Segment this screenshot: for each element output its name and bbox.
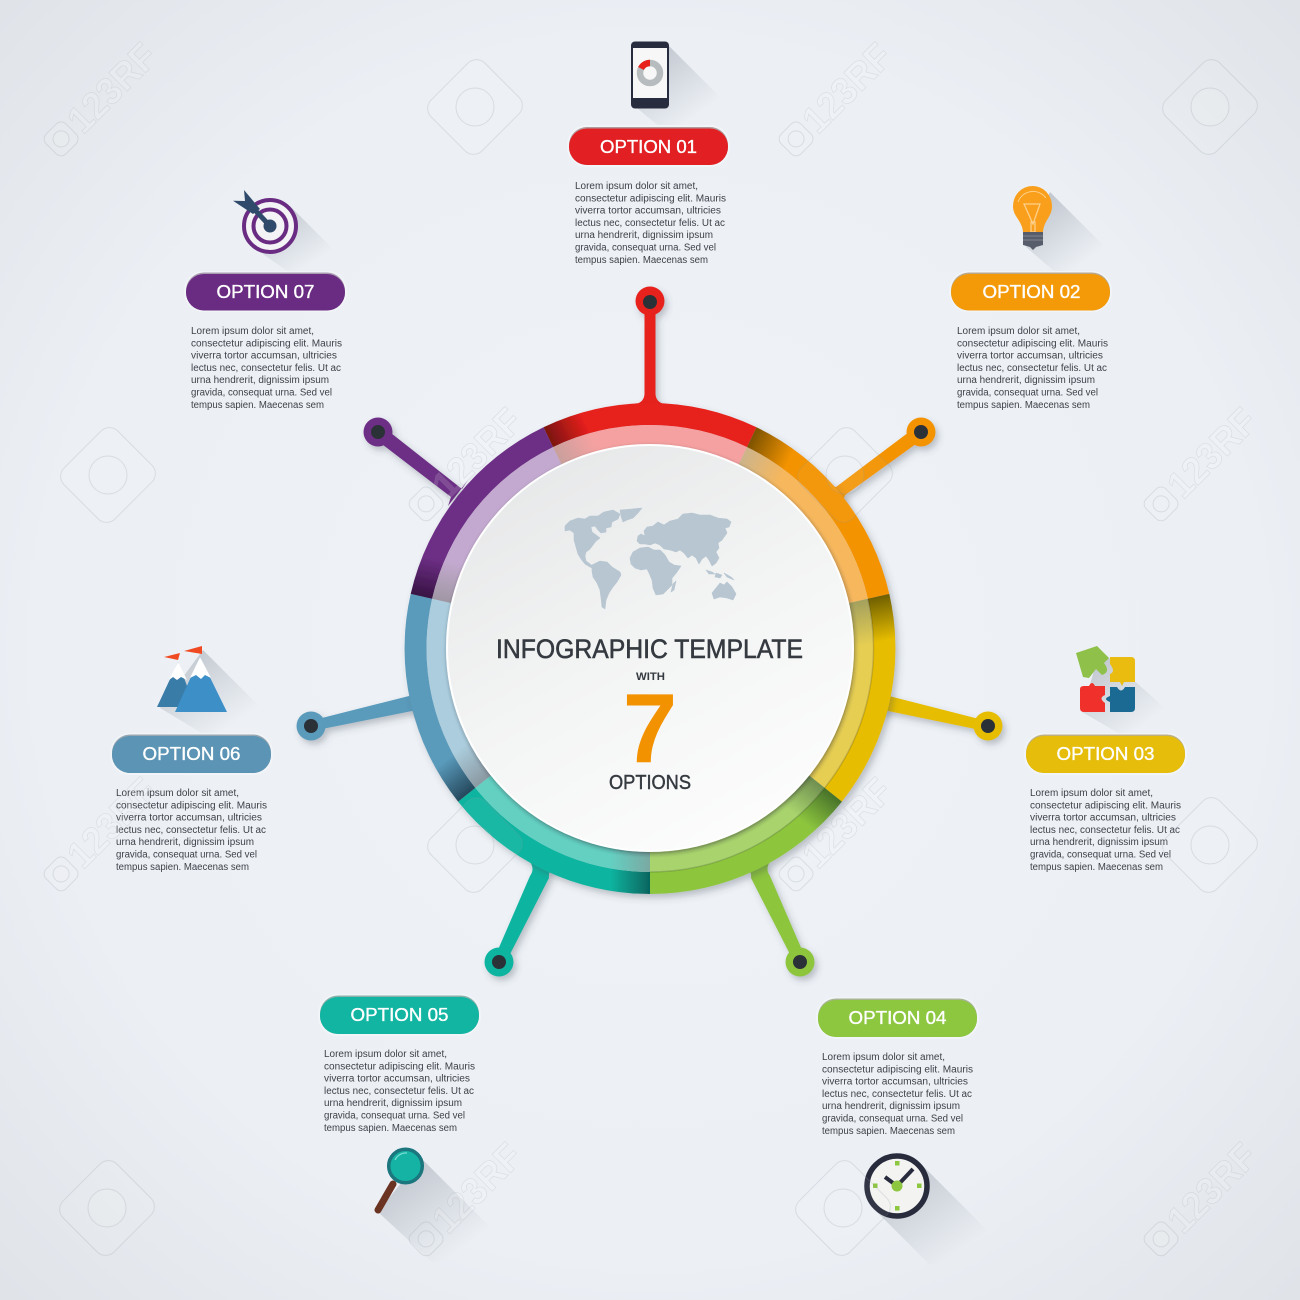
big number 7: 7 bbox=[623, 673, 677, 783]
icon: clock bbox=[867, 1156, 1022, 1265]
watermarks: 123RF bbox=[425, 401, 531, 507]
connector: option 05 bbox=[484, 862, 555, 976]
text: option 05: gravida, consequat urna. Sed vel bbox=[324, 1110, 465, 1122]
text: option 07: gravida, consequat urna. Sed vel bbox=[191, 388, 332, 398]
pill: option 04 bbox=[816, 997, 979, 1039]
text: option 01: consectetur adipiscing elit. Mauris bbox=[575, 193, 726, 204]
text: option 02: tempus sapien. Maecenas sem bbox=[957, 400, 1090, 411]
pill: option 06: OPTION 06 bbox=[142, 744, 240, 764]
text: option 04: urna hendrerit, dignissim ipsum bbox=[822, 1101, 960, 1112]
text: option 06: Lorem ipsum dolor sit amet, bbox=[116, 788, 239, 799]
text: option 01 bbox=[575, 181, 726, 266]
text: option 01: tempus sapien. Maecenas sem bbox=[575, 255, 708, 266]
text: option 03: viverra tortor accumsan, ultricies bbox=[1030, 813, 1176, 824]
pill: option 04: OPTION 04 bbox=[848, 1008, 946, 1028]
text: option 05: tempus sapien. Maecenas sem bbox=[324, 1123, 457, 1134]
connector: option 07 bbox=[364, 418, 468, 506]
icon: mountains bbox=[157, 646, 288, 735]
pill: option 07: OPTION 07 bbox=[216, 282, 314, 302]
text: option 07: lectus nec, consectetur felis. Ut ac bbox=[191, 363, 341, 374]
icon: light bulb bbox=[1013, 186, 1130, 272]
text: option 04 bbox=[822, 1052, 973, 1137]
watermarks: 123RF bbox=[1160, 1136, 1266, 1242]
text: option 01: urna hendrerit, dignissim ipsum bbox=[575, 230, 713, 241]
options label: OPTIONS bbox=[609, 772, 691, 794]
segment: orange bbox=[737, 427, 889, 604]
text: option 05: lectus nec, consectetur felis. Ut ac bbox=[324, 1086, 474, 1097]
text: option 01: lectus nec, consectetur felis. Ut ac bbox=[575, 218, 725, 229]
text: option 02: gravida, consequat urna. Sed vel bbox=[957, 388, 1098, 398]
text: option 06: tempus sapien. Maecenas sem bbox=[116, 862, 249, 873]
connector: option 06 bbox=[296, 690, 420, 740]
text: option 02: lectus nec, consectetur felis. Ut ac bbox=[957, 363, 1107, 374]
text: option 01: viverra tortor accumsan, ultricies bbox=[575, 206, 721, 217]
text: option 02: urna hendrerit, dignissim ipsum bbox=[957, 375, 1095, 386]
text: option 03: gravida, consequat urna. Sed vel bbox=[1030, 850, 1171, 860]
text: option 06 bbox=[116, 788, 267, 873]
center title: INFOGRAPHIC TEMPLATE bbox=[496, 634, 803, 664]
watermarks: 123RF bbox=[1160, 401, 1266, 507]
connector: option 01 bbox=[636, 286, 664, 404]
pill: option 05: OPTION 05 bbox=[350, 1005, 448, 1025]
text: option 06: viverra tortor accumsan, ultricies bbox=[116, 813, 262, 824]
text: option 03: urna hendrerit, dignissim ipsum bbox=[1030, 837, 1168, 848]
icon: magnifier bbox=[378, 1149, 525, 1262]
text: option 03: tempus sapien. Maecenas sem bbox=[1030, 862, 1163, 873]
text: option 04: tempus sapien. Maecenas sem bbox=[822, 1126, 955, 1137]
watermarks: 123RF bbox=[425, 1136, 531, 1242]
text: option 03: lectus nec, consectetur felis. Ut ac bbox=[1030, 825, 1180, 836]
text: option 06: lectus nec, consectetur felis. Ut ac bbox=[116, 825, 266, 836]
segment: yellow bbox=[806, 594, 895, 802]
text: option 03: Lorem ipsum dolor sit amet, bbox=[1030, 788, 1153, 799]
text: option 07: consectetur adipiscing elit. Mauris bbox=[191, 338, 342, 349]
world map bbox=[565, 508, 736, 609]
connector: option 02 bbox=[826, 418, 936, 510]
connector: option 03 bbox=[880, 690, 1002, 740]
text: option 02: Lorem ipsum dolor sit amet, bbox=[957, 326, 1080, 337]
text: option 07 bbox=[191, 326, 342, 411]
pill: option 03 bbox=[1024, 733, 1187, 775]
pill: option 06 bbox=[110, 733, 273, 775]
text: option 05: consectetur adipiscing elit. Mauris bbox=[324, 1061, 475, 1072]
text: option 03: consectetur adipiscing elit. Mauris bbox=[1030, 800, 1181, 811]
segment: teal bbox=[458, 773, 650, 894]
text: option 04: Lorem ipsum dolor sit amet, bbox=[822, 1052, 945, 1063]
pill: option 01: OPTION 01 bbox=[600, 137, 697, 157]
pill: option 02 bbox=[949, 271, 1112, 312]
watermarks: 123RF bbox=[795, 36, 901, 142]
center circle bbox=[447, 445, 853, 851]
connector: option 04 bbox=[745, 862, 814, 976]
icon: phone bbox=[631, 42, 745, 127]
text: option 02: viverra tortor accumsan, ultricies bbox=[957, 351, 1103, 362]
text: option 01: gravida, consequat urna. Sed vel bbox=[575, 242, 716, 254]
text: option 05: viverra tortor accumsan, ultricies bbox=[324, 1074, 470, 1085]
text: option 06: urna hendrerit, dignissim ipsum bbox=[116, 837, 254, 848]
text: option 07: tempus sapien. Maecenas sem bbox=[191, 400, 324, 411]
text: option 02 bbox=[957, 326, 1108, 411]
text: option 04: viverra tortor accumsan, ultricies bbox=[822, 1077, 968, 1088]
text: option 03 bbox=[1030, 788, 1181, 873]
text: option 07: urna hendrerit, dignissim ipsum bbox=[191, 375, 329, 386]
text: option 06: gravida, consequat urna. Sed vel bbox=[116, 850, 257, 860]
segment: blue bbox=[405, 594, 494, 802]
pill: option 01 bbox=[567, 125, 730, 167]
pill: option 03: OPTION 03 bbox=[1056, 744, 1154, 764]
segment: green bbox=[650, 773, 842, 894]
text: option 05 bbox=[324, 1049, 475, 1134]
watermarks: 123RF bbox=[60, 36, 166, 142]
segment: purple bbox=[411, 427, 563, 604]
text: option 04: lectus nec, consectetur felis. Ut ac bbox=[822, 1089, 972, 1100]
text: option 04: gravida, consequat urna. Sed vel bbox=[822, 1114, 963, 1124]
text: option 01: Lorem ipsum dolor sit amet, bbox=[575, 181, 698, 192]
watermarks: 123RF bbox=[795, 771, 901, 877]
text: option 07: Lorem ipsum dolor sit amet, bbox=[191, 326, 314, 337]
text: option 07: viverra tortor accumsan, ultricies bbox=[191, 351, 337, 362]
ring: seven colored segments bbox=[405, 403, 895, 894]
pill: option 02: OPTION 02 bbox=[982, 282, 1080, 302]
text: option 04: consectetur adipiscing elit. Mauris bbox=[822, 1064, 973, 1075]
with label: WITH bbox=[636, 671, 665, 683]
text: option 02: consectetur adipiscing elit. Mauris bbox=[957, 338, 1108, 349]
pill: option 05 bbox=[318, 994, 481, 1036]
segment: red bbox=[544, 403, 756, 468]
text: option 05: Lorem ipsum dolor sit amet, bbox=[324, 1049, 447, 1060]
watermarks: 123RF bbox=[60, 771, 166, 877]
icon: target bbox=[233, 190, 357, 273]
pill: option 07 bbox=[184, 271, 347, 312]
icon: puzzle bbox=[1076, 646, 1195, 735]
text: option 05: urna hendrerit, dignissim ipsum bbox=[324, 1098, 462, 1109]
text: option 06: consectetur adipiscing elit. Mauris bbox=[116, 800, 267, 811]
